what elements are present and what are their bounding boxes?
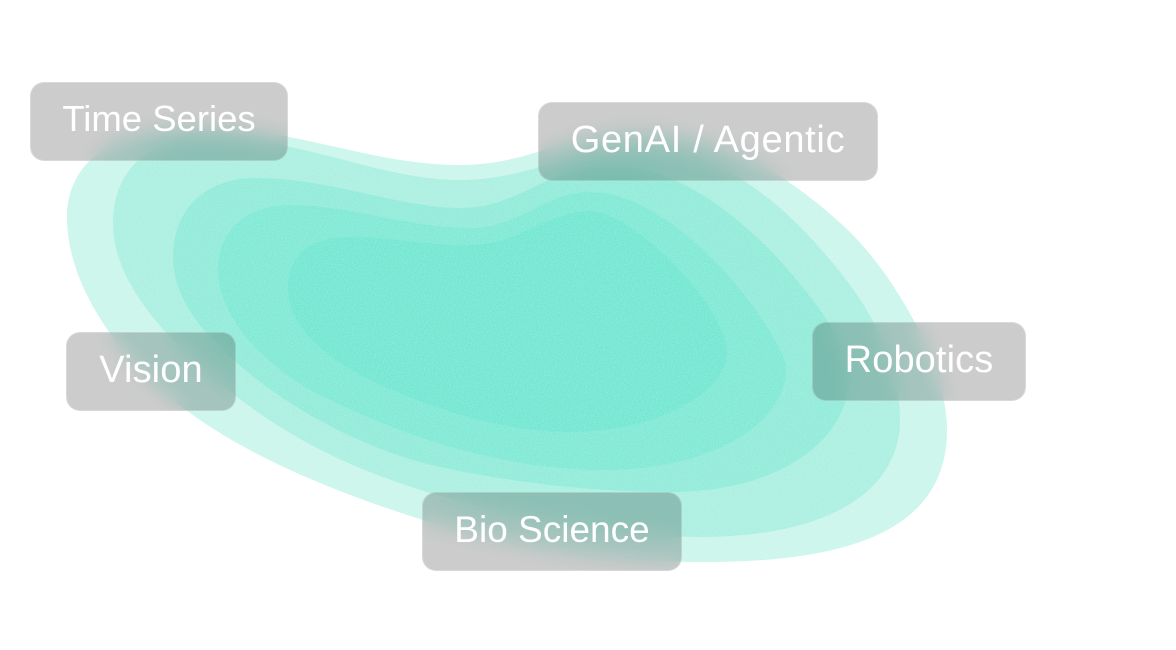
label: Robotics — [812, 322, 1026, 401]
label: Vision: Vision — [99, 349, 203, 391]
label: Bio Science: Bio Science — [454, 509, 650, 550]
contour layer 1 outermost — [67, 127, 947, 562]
contour layer 4 — [218, 192, 786, 470]
label: GenAI / Agentic: GenAI / Agentic — [571, 119, 845, 161]
label: GenAI / Agentic — [538, 102, 878, 181]
contour layer 5 innermost — [288, 211, 727, 432]
label: Bio Science — [422, 492, 682, 571]
label: Vision — [66, 332, 236, 411]
contour layer 3 — [173, 165, 848, 492]
label: Time Series — [30, 82, 288, 161]
label: Robotics: Robotics — [845, 339, 993, 381]
contour layer 2 — [113, 137, 900, 537]
label: Time Series: Time Series — [62, 98, 256, 139]
